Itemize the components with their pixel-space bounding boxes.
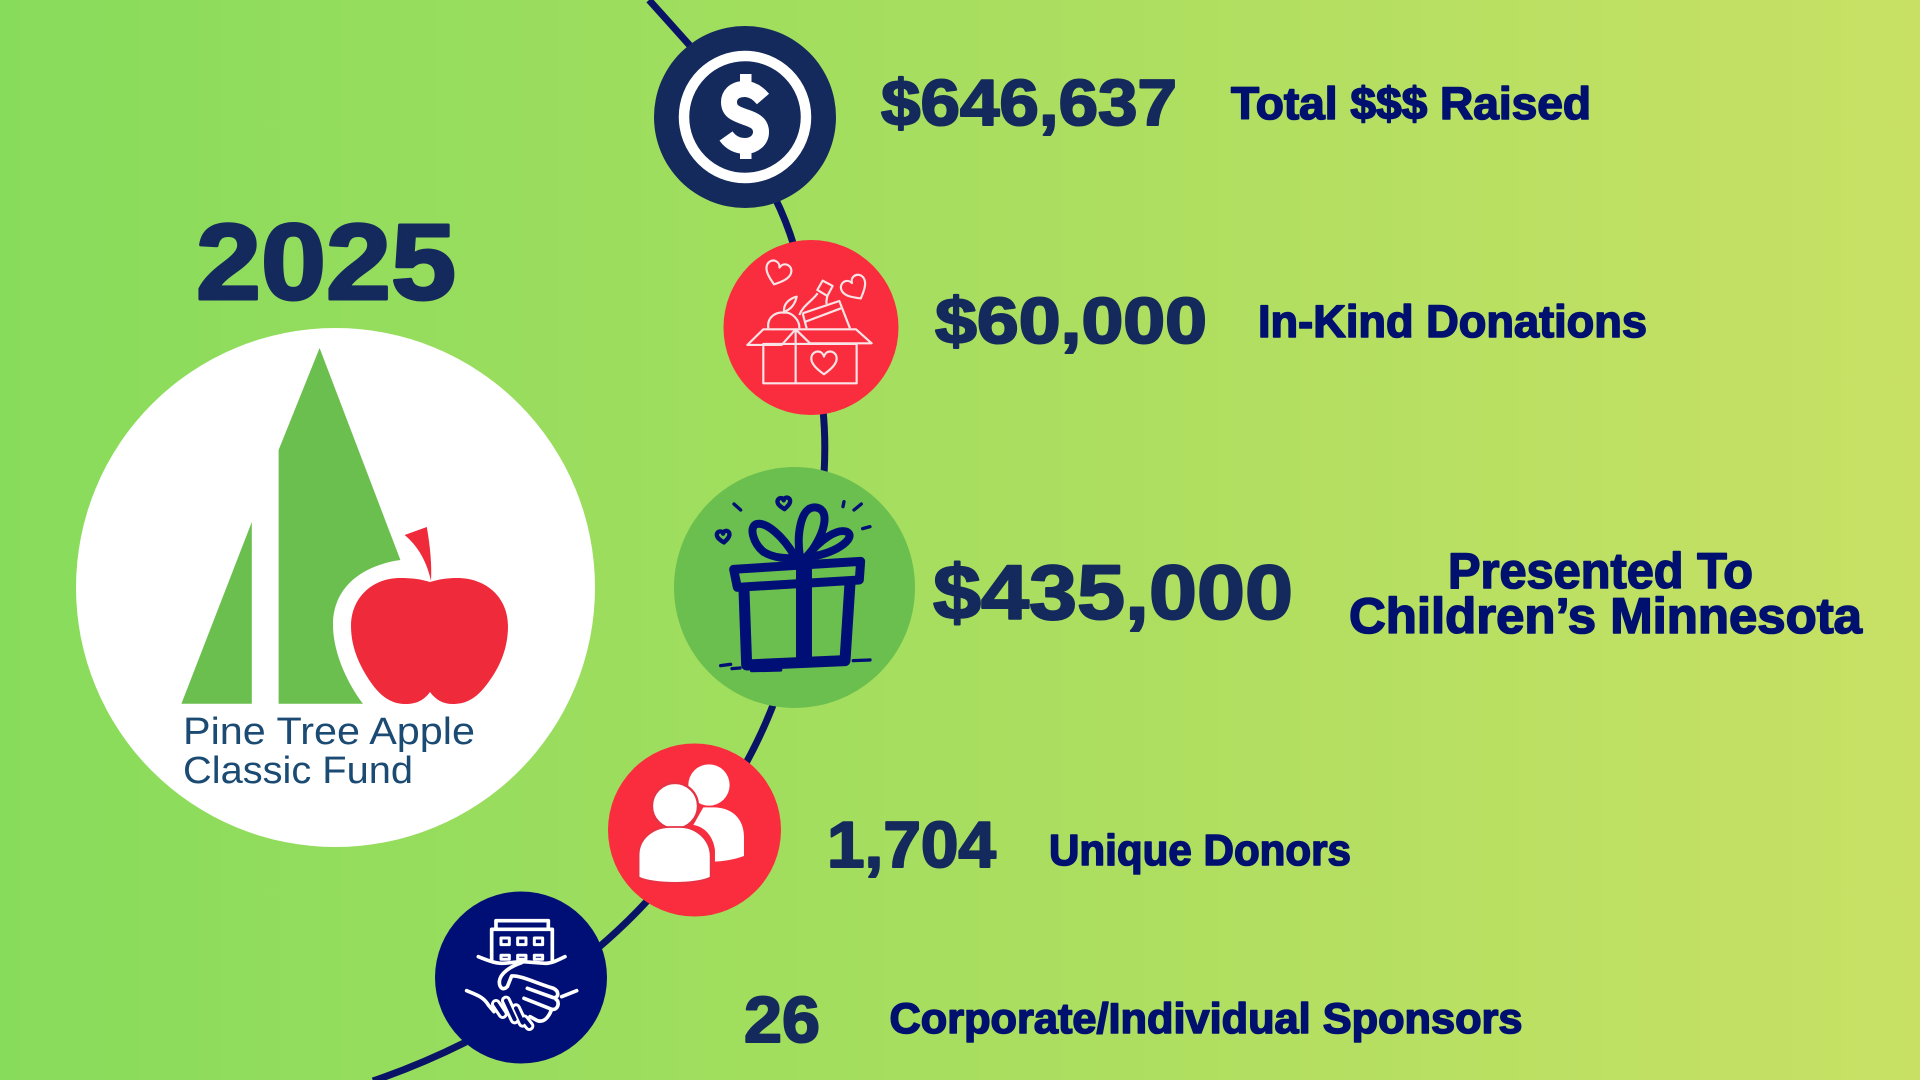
heading: 2025: 2025 [196, 201, 456, 322]
logo: small tree [181, 522, 252, 704]
timeline arc [373, 0, 825, 1080]
label: presented to children's minnesota: Presented To [1448, 543, 1753, 599]
icon: gift [674, 467, 915, 708]
stat: total raised amount: $646,637 [881, 66, 1177, 139]
label: presented to children's minnesota [1349, 543, 1863, 644]
logo text: Classic Fund [183, 750, 413, 792]
icon: donation box [724, 240, 898, 415]
logo: large tree [279, 348, 400, 704]
icon: sponsors handshake [435, 892, 607, 1064]
label: corporate/individual sponsors: Corporate/Individual Sponsors [890, 995, 1522, 1043]
label: in-kind donations: In-Kind Donations [1258, 296, 1647, 347]
stat: presented amount: $435,000 [933, 550, 1293, 636]
stat: unique donors count: 1,704 [827, 808, 996, 881]
logo text [183, 711, 475, 792]
logo text: Pine Tree Apple [183, 711, 475, 753]
icon: donors [608, 744, 781, 916]
stat: in-kind amount: $60,000 [935, 284, 1207, 357]
label: unique donors: Unique Donors [1049, 826, 1351, 875]
panel: logo [76, 328, 595, 847]
stat: sponsors count: 26 [744, 983, 820, 1056]
icon: dollar coin [654, 26, 836, 208]
label: total raised: Total $$$ Raised [1231, 78, 1591, 129]
logo: apple [351, 527, 508, 704]
label: presented to children's minnesota: Children’s Minnesota [1349, 588, 1863, 644]
